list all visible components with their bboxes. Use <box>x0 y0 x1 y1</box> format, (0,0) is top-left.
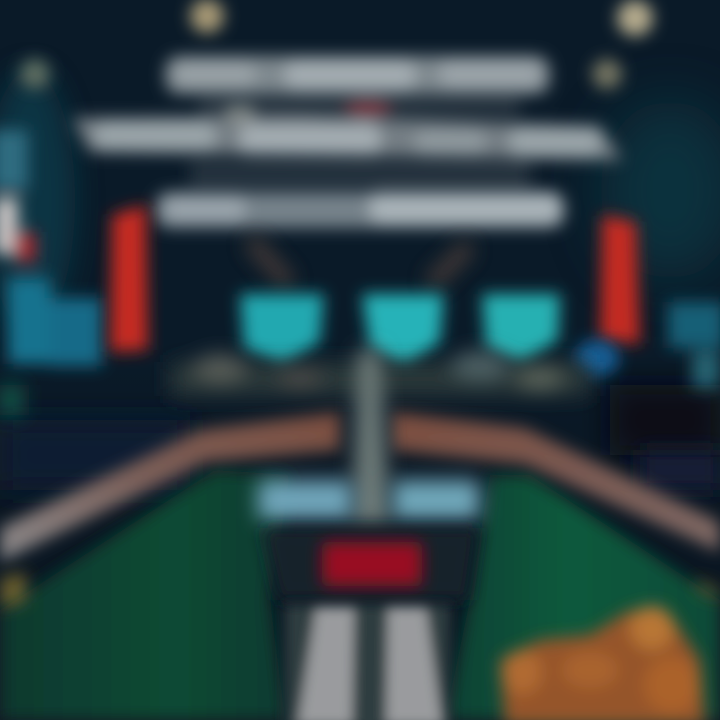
heading: blurred title banner <box>72 56 622 228</box>
heading line 2 <box>72 102 622 160</box>
heading line 3 <box>155 192 565 228</box>
red banner right <box>600 215 640 344</box>
truss struts <box>250 240 470 285</box>
heading line 1 <box>165 56 550 94</box>
left rail <box>0 412 340 562</box>
dark pedestal <box>262 528 478 600</box>
light blue floor panels <box>258 480 480 520</box>
floor green <box>0 470 720 720</box>
ceiling lights <box>20 0 653 89</box>
cyan screens <box>240 294 720 388</box>
crowd band <box>0 351 590 415</box>
central tower <box>352 350 390 525</box>
screen 2 <box>362 294 444 368</box>
right rail <box>392 412 720 552</box>
red block <box>322 542 422 586</box>
central walkway stripes <box>285 605 450 720</box>
left side flag and screens <box>0 130 102 366</box>
red banner left <box>110 205 148 352</box>
screen 3 <box>482 294 560 364</box>
left green field <box>0 470 290 720</box>
orange pile <box>500 606 705 720</box>
barrier rails <box>0 412 720 562</box>
screen 1 <box>240 294 324 366</box>
right green field <box>445 475 720 720</box>
